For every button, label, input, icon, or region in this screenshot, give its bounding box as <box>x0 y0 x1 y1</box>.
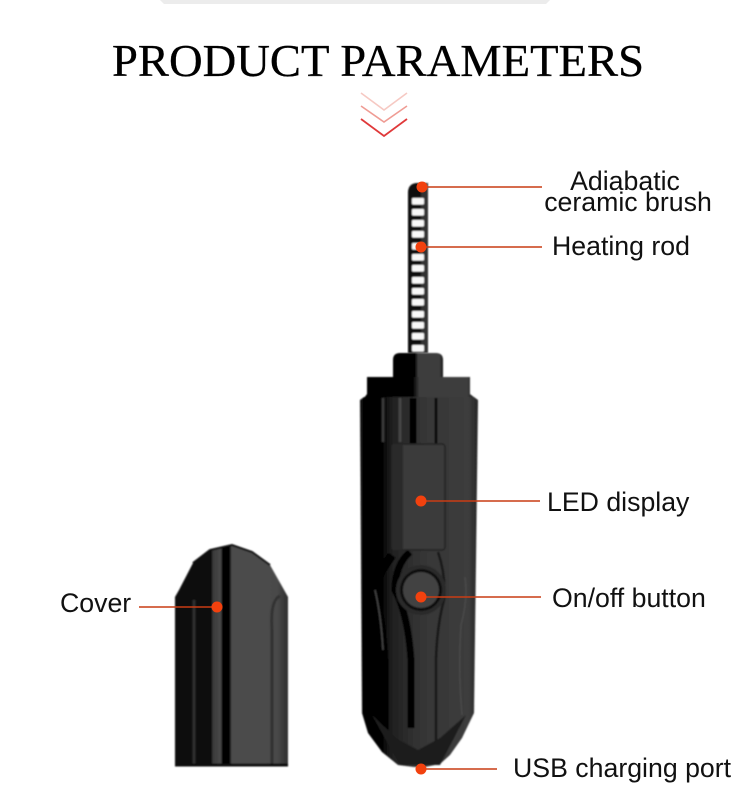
top cap <box>364 377 475 398</box>
top shadow strip <box>160 0 550 4</box>
callout: cover <box>60 588 222 618</box>
neck collar <box>393 353 443 378</box>
bottom facets <box>372 715 466 765</box>
LED display <box>392 444 445 550</box>
callout: heating rod <box>416 231 690 261</box>
on/off button <box>396 565 446 615</box>
heating brush <box>408 183 428 353</box>
grooves <box>372 398 466 745</box>
cover <box>175 545 288 766</box>
callout: LED display <box>416 487 690 517</box>
callout: on/off button <box>416 583 706 613</box>
icon: chevrons <box>361 93 407 136</box>
callout: adiabatic ceramic brush: ceramic brush <box>544 187 712 217</box>
callout: on/off button: On/off button <box>552 583 706 613</box>
callout: adiabatic ceramic brush: Adiabatic <box>570 166 680 196</box>
callout: cover: Cover <box>60 588 131 618</box>
callout: adiabatic ceramic brush <box>416 166 712 217</box>
curler body <box>360 353 478 767</box>
callout: LED display: LED display <box>547 487 690 517</box>
title: PRODUCT PARAMETERS <box>112 35 644 86</box>
callout: USB charging port: USB charging port <box>513 753 732 783</box>
main handle <box>360 397 478 767</box>
callout: heating rod: Heating rod <box>552 231 690 261</box>
callout: USB charging port <box>416 753 732 783</box>
